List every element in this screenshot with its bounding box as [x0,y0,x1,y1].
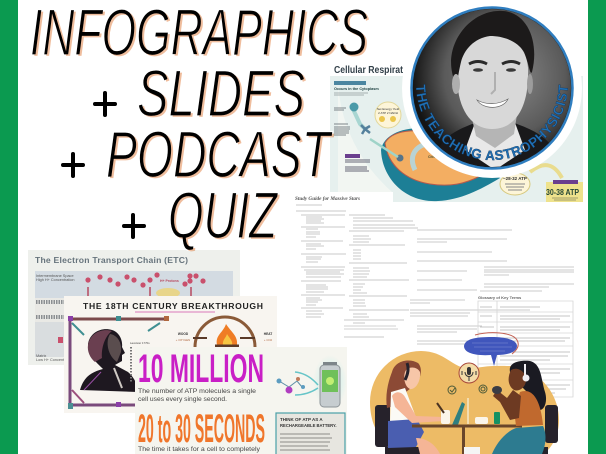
label: concentration: High H+ Concentration [36,278,75,282]
title line: slides: SLIDES [137,56,305,130]
callout: net energy yield: Net Energy Yield [377,107,399,111]
glycolysis molecule diagram [334,102,370,135]
title line: podcast: PODCAST [106,117,333,191]
study guide heading: Study Guide for Massive Stars [295,196,360,202]
label: protons: H+ Protons [160,279,179,283]
total net yield box [546,180,583,202]
panel: podcast illustration [370,333,559,454]
plus sign 1 [95,93,115,115]
left woman [386,360,450,454]
study guide text lines [296,205,346,317]
arrow: yellow to total [530,165,562,178]
table [412,398,522,454]
panel: cellular respiration infographic [330,60,583,202]
mitochondrion [370,128,500,201]
heading: 18th century breakthrough: THE 18TH CENTURY BREAKTHROUGH [83,301,263,311]
total net yield box: 30-38 ATP [546,188,580,197]
title line: quiz: QUIZ [168,178,279,252]
fire diagram: + OXYGEN [176,338,190,342]
yellow blob [370,351,559,454]
right green border [588,0,606,454]
summary table [478,301,573,397]
label: matrix: Matrix [36,354,46,358]
panel: study guide document [292,192,582,397]
title shadow: QUIZ [170,180,281,254]
fire diagram: HEAT [264,332,272,336]
heading: cellular respiration: Cellular Respirat [334,65,404,76]
left green border [0,0,18,454]
label: intermembrane space: Intermembrane Space [36,274,74,278]
molecule illustration [276,372,318,395]
mitochondrion: Citric Acid [428,155,445,159]
blue ring [412,8,572,168]
stage one label [334,81,379,95]
ornate portrait frame [68,316,169,409]
title shadow: PODCAST [108,118,335,192]
label: low concentration: Low H+ Concentration [36,358,74,362]
portrait vertical caption [130,341,150,382]
fire diagram [176,317,273,347]
protons [85,272,206,288]
callout: 28-32 ATP: ~28-32 ATP [503,176,527,181]
plus sign 3 [124,215,144,237]
chairs [375,405,558,454]
panel: 10 million statistics slide [135,347,347,454]
battery illustration [316,359,344,408]
fire diagram: + CO2 [264,338,273,342]
title [30,0,370,254]
panel: electron transport chain slide [28,250,240,365]
title shadow [32,0,370,254]
description: ATP molecules: The number of ATP molecules a single [138,388,256,395]
callout: rechargeable battery [276,413,345,454]
small icon badges [448,385,487,394]
callout: rechargeable battery: THINK OF ATP AS A [280,417,323,422]
description line: every second: cell uses every single second. [138,396,227,403]
podcast microphone badge [459,363,479,383]
heading: electron transport chain: The Electron Transport Chain (ETC) [35,255,188,265]
right woman [492,361,546,454]
callout: 28-32 ATP [500,173,530,195]
callout: net energy yield [375,102,401,128]
portrait silhouette [80,329,138,392]
tablet [452,402,465,425]
panel: 10 million statistics slide: 20 to 30 SECONDS [138,407,265,451]
panel: 18th century breakthrough slide [64,296,277,413]
title shadow: SLIDES [139,58,307,132]
portrait vertical caption: Lavoisier 1770s [130,341,150,345]
callout: rechargeable battery: RECHARGEABLE BATTERY. [280,423,337,428]
label: summary table heading: Glossary of Key Terms [478,295,522,300]
circular text: THE TEACHING ASTROPHYSICIST [416,84,568,160]
photo portrait [412,8,572,175]
portrait badge [402,6,582,178]
plus sign 2 [63,154,83,176]
speech bubble [464,333,518,366]
stat: 10 million: 10 MILLION [138,347,264,391]
stage two label [345,154,370,171]
stage one label: Occurs in the Cytoplasm [334,87,379,91]
white halo [402,0,582,178]
description: time: The time it takes for a cell to completely [138,446,261,453]
fire diagram: WOOD [178,332,189,336]
callout: net energy yield: 2 ATP 2 NADH [378,111,398,115]
